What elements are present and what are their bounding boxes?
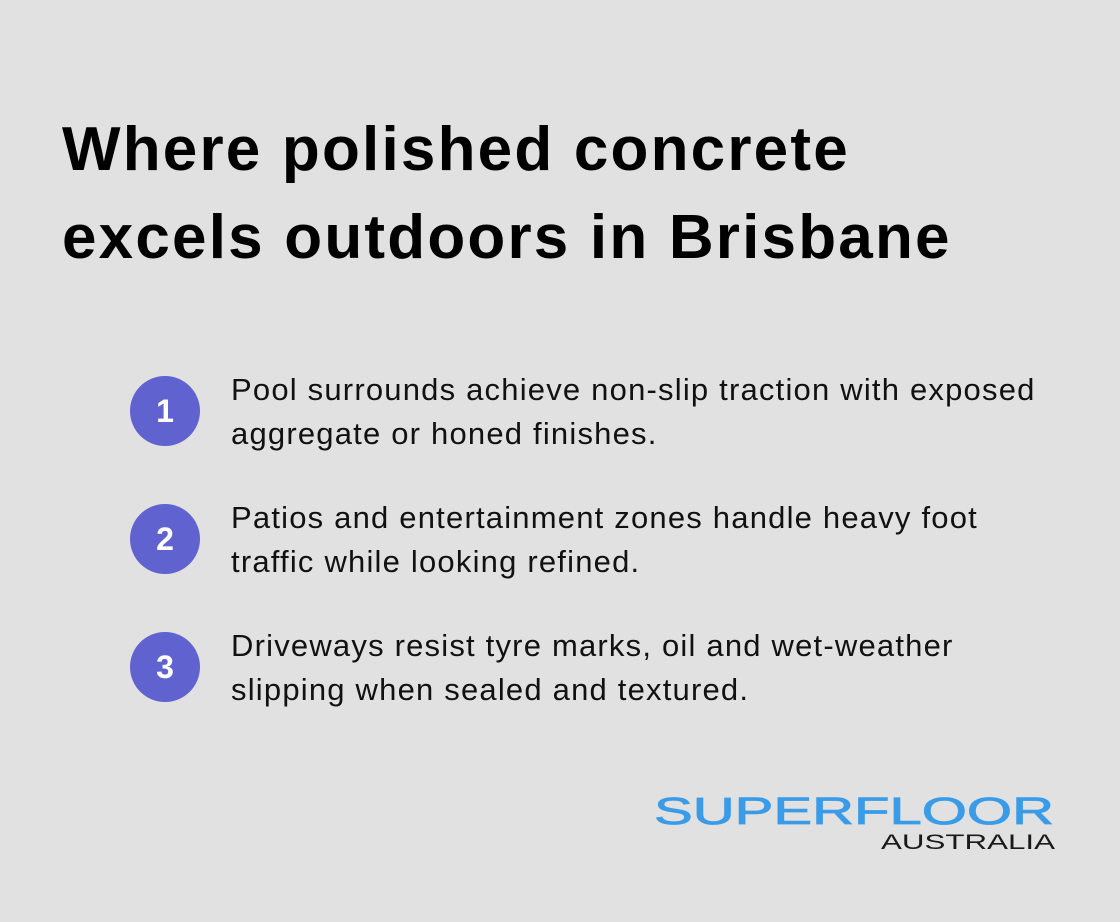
text 2: Patios and entertainment zones handle heavy foot (231, 500, 978, 535)
text 3: Driveways resist tyre marks, oil and wet-weather (231, 628, 954, 663)
item 2 (130, 500, 978, 579)
icon: number 2: 2 (156, 521, 174, 557)
icon: number 2 (130, 504, 200, 574)
text 1 (231, 372, 1036, 451)
icon: number 3: 3 (156, 649, 174, 685)
icon: number 1 (130, 376, 200, 446)
text 3: slipping when sealed and textured. (231, 672, 749, 707)
icon: number 1: 1 (156, 393, 174, 429)
text 2 (231, 500, 978, 579)
icon: number 3 (130, 632, 200, 702)
logo (654, 791, 1055, 852)
text 1: Pool surrounds achieve non-slip traction with exposed (231, 372, 1036, 407)
text 1: aggregate or honed finishes. (231, 416, 658, 451)
logo: SUPERFLOOR (654, 791, 1054, 833)
title: Where polished concrete (62, 115, 850, 184)
item 1 (130, 372, 1036, 451)
text 3 (231, 628, 954, 707)
title: excels outdoors in Brisbane (62, 203, 952, 272)
title (62, 115, 952, 272)
item 3 (130, 628, 954, 707)
text 2: traffic while looking refined. (231, 544, 640, 579)
